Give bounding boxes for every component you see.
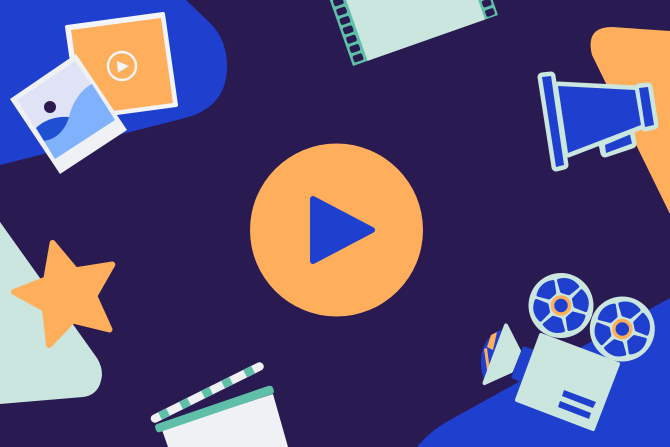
orange blob: top right (591, 27, 670, 214)
mint blob: left (0, 222, 102, 404)
blue blob: top left (0, 0, 227, 165)
play button (250, 144, 423, 316)
icon: film strip (323, 0, 498, 66)
icon: film projector (481, 273, 655, 429)
projector bulb (481, 330, 505, 379)
reel two (590, 296, 655, 362)
projector body (517, 335, 618, 429)
icon: star (14, 243, 112, 345)
projector connector (513, 348, 545, 386)
icon: video thumbnail card (67, 14, 176, 118)
projector lens cone (484, 326, 519, 383)
icon: megaphone (542, 76, 654, 167)
icon: clapperboard (155, 366, 288, 447)
blue blob: bottom right (417, 298, 670, 447)
icon: photo card (10, 54, 127, 174)
reel one (528, 273, 594, 338)
